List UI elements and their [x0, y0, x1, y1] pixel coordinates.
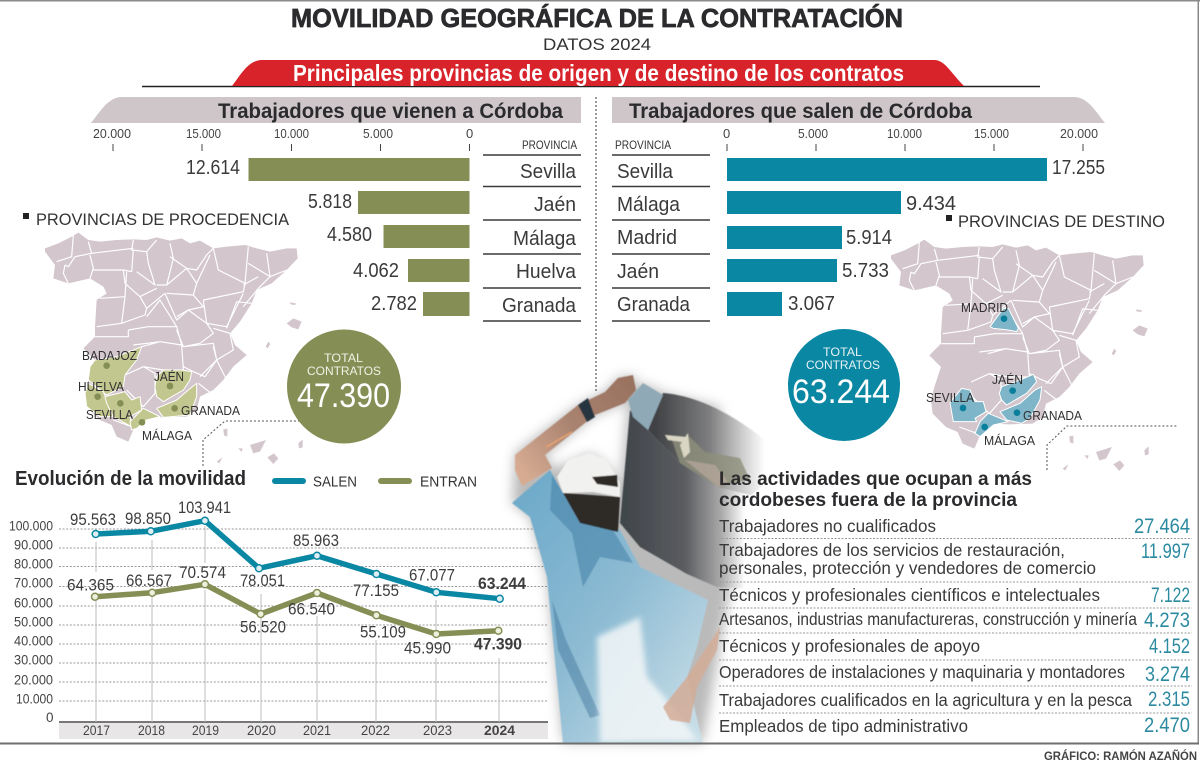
map labels: destination: GRANADA — [1023, 408, 1082, 423]
red banner: Principales provincias de origen y de destino de los contratos — [293, 60, 904, 86]
row values — [1134, 515, 1190, 737]
province table: vienen: Sevilla — [520, 161, 577, 183]
axis: vienen: 5.000 — [363, 126, 393, 141]
data labels: 78.051 — [240, 571, 285, 590]
province table: salen: Jaén — [617, 261, 659, 283]
y axis and gridlines — [9, 518, 548, 739]
sack front panel — [620, 410, 770, 590]
province table: vienen: Jaén — [534, 194, 576, 216]
bottom rule — [0, 742, 1199, 744]
bar chart: salen: 3.067 — [788, 292, 835, 315]
cap — [557, 453, 620, 497]
map labels: origin: BADAJOZ — [82, 348, 137, 363]
neck and hair — [563, 493, 620, 532]
data labels: 85.963 — [293, 531, 339, 550]
divider — [595, 97, 597, 392]
map labels: destination: MÁLAGA — [984, 433, 1035, 448]
axis: salen: 5.000 — [798, 126, 828, 141]
data labels: 70.574 — [179, 563, 226, 582]
axis: vienen: 20.000 — [93, 126, 131, 141]
total circle: origin: CONTRATOS — [307, 364, 381, 378]
bar chart: vienen: 4.580 — [327, 223, 372, 246]
map labels: origin: JAÉN — [154, 369, 184, 384]
chart heading: Evolución de la movilidad — [15, 467, 246, 490]
province table: vienen: Málaga — [513, 228, 577, 250]
map shape: Spain destination — [891, 240, 1149, 471]
x axis years: 2022 — [361, 723, 390, 738]
total circle: origin: 47.390 — [297, 377, 390, 415]
row labels: Operadores de instalaciones y maquinaria y montadores — [719, 662, 1125, 682]
total circle: origin — [287, 330, 401, 444]
y axis and gridlines: 70.000 — [14, 576, 53, 590]
year drop lines — [96, 526, 499, 722]
data labels: 77.155 — [353, 581, 399, 600]
panel: activities table — [719, 469, 1192, 737]
map labels: destination: MADRID — [961, 300, 1008, 315]
row values: 4.273 — [1144, 609, 1190, 632]
bar chart: salen: 9.434 — [906, 192, 956, 215]
row values: 27.464 — [1134, 515, 1190, 538]
watch — [578, 398, 595, 422]
table heading: cordobeses fuera de la provincia — [719, 490, 1017, 511]
province table: salen: PROVINCIA — [615, 138, 671, 152]
map heading: procedencia: PROVINCIAS DE PROCEDENCIA — [36, 210, 290, 229]
line chart: evolution of mobility — [9, 467, 548, 739]
data labels: 95.563 — [70, 510, 116, 529]
row labels: Técnicos y profesionales de apoyo — [719, 636, 980, 656]
province table: vienen: Granada — [502, 295, 577, 317]
bar chart: vienen: 4.062 — [353, 259, 399, 282]
row labels: Técnicos y profesionales científicos e intelectuales — [719, 585, 1100, 605]
x axis years: 2021 — [303, 723, 331, 738]
row values: 2.470 — [1144, 714, 1190, 737]
panel: workers leaving Córdoba — [612, 97, 1105, 321]
heading: salen: Trabajadores que salen de Córdoba — [629, 100, 972, 123]
axis: vienen: 15.000 — [186, 126, 221, 141]
province table: salen: Málaga — [617, 194, 681, 216]
axis: salen — [723, 126, 1098, 151]
total circle: destination: 63.244 — [792, 373, 890, 411]
row labels: Trabajadores de los servicios de restauración, — [719, 540, 1065, 560]
province table: vienen — [483, 138, 581, 321]
data labels: 103.941 — [178, 498, 231, 517]
heading: vienen: Trabajadores que vienen a Córdoba — [218, 100, 563, 123]
map: provinces of origin — [23, 210, 303, 466]
row labels: Trabajadores cualificados en la agricultura y en la pesca — [719, 690, 1132, 710]
bar chart: vienen: 12.614 — [186, 156, 240, 179]
y axis and gridlines: 60.000 — [14, 596, 53, 610]
y axis and gridlines: 10.000 — [16, 692, 53, 706]
sack flap — [628, 383, 663, 430]
row labels: Empleados de tipo administrativo — [719, 716, 968, 736]
y axis and gridlines: 80.000 — [14, 556, 53, 572]
row values: 2.315 — [1148, 688, 1190, 711]
line: salen — [92, 517, 503, 602]
x axis years: 2024 — [484, 723, 515, 738]
arm — [515, 375, 636, 486]
data labels: 98.850 — [125, 509, 171, 528]
province table: salen: Madrid — [617, 227, 677, 249]
map labels: origin: MÁLAGA — [142, 428, 192, 443]
y axis and gridlines: 0 — [46, 710, 54, 725]
x axis years: 2018 — [138, 723, 165, 738]
x axis years — [83, 723, 515, 738]
row labels: personales, protección y vendedores de comercio — [719, 558, 1096, 578]
data labels: 45.990 — [404, 638, 451, 658]
title: MOVILIDAD GEOGRÁFICA DE LA CONTRATACIÓN — [291, 3, 903, 33]
x axis years: 2017 — [83, 723, 110, 738]
data labels — [67, 498, 526, 658]
y axis and gridlines: 50.000 — [14, 614, 53, 630]
axis: salen: 20.000 — [1060, 126, 1098, 141]
heading: salen — [612, 97, 1105, 123]
sack interior — [648, 393, 770, 500]
legend: SALEN — [313, 474, 357, 490]
shirt — [512, 470, 708, 743]
subtitle: DATOS 2024 — [543, 35, 651, 54]
heading: vienen — [91, 97, 581, 123]
province table: salen: Sevilla — [617, 161, 674, 183]
data labels: 67.077 — [409, 566, 455, 584]
y axis and gridlines: 100.000 — [9, 518, 53, 534]
total circle: origin: TOTAL — [324, 351, 363, 365]
legend: ENTRAN — [420, 474, 477, 490]
bar chart: vienen: 2.782 — [371, 292, 417, 315]
row values: 3.274 — [1145, 663, 1190, 686]
data labels: 64.365 — [67, 576, 114, 594]
axis: salen: 15.000 — [974, 126, 1009, 141]
panel: workers coming to Córdoba — [91, 97, 581, 321]
total circle: destination: TOTAL — [823, 345, 862, 359]
row labels: Trabajadores no cualificados — [719, 516, 936, 536]
map: provinces of destination — [891, 212, 1178, 471]
map heading: destino: PROVINCIAS DE DESTINO — [958, 212, 1165, 231]
row separators — [719, 538, 1192, 713]
province table: salen: Granada — [617, 294, 691, 316]
x axis years: 2020 — [247, 723, 276, 738]
total circle: destination: CONTRATOS — [806, 358, 880, 372]
legend — [275, 474, 477, 490]
province table: salen — [612, 138, 710, 321]
bar chart: vienen — [186, 156, 470, 316]
province table: vienen: Huelva — [516, 261, 577, 283]
data labels: 55.109 — [360, 622, 406, 642]
map labels: origin: SEVILLA — [86, 407, 133, 422]
data labels: 66.540 — [288, 600, 335, 618]
map labels: origin: HUELVA — [78, 379, 124, 394]
total circle: destination — [788, 329, 900, 441]
axis: vienen — [93, 126, 473, 151]
row labels — [719, 516, 1137, 736]
y axis and gridlines: 20.000 — [14, 672, 53, 688]
highlighted provinces: destination — [950, 308, 1042, 437]
map labels: origin — [78, 348, 240, 443]
y axis and gridlines: 30.000 — [14, 652, 53, 668]
axis: vienen: 10.000 — [274, 126, 309, 141]
map labels: destination — [926, 300, 1082, 448]
map labels: destination: JAÉN — [992, 372, 1023, 387]
hand on hip — [663, 627, 720, 723]
table heading — [719, 469, 1032, 511]
row values: 4.152 — [1149, 635, 1190, 658]
table heading: Las actividades que ocupan a más — [719, 469, 1032, 490]
bar chart: vienen: 5.818 — [308, 190, 352, 213]
map labels: destination: SEVILLA — [926, 390, 974, 405]
data labels: 56.520 — [240, 618, 286, 636]
bar chart: salen: 5.914 — [846, 226, 892, 249]
y axis and gridlines: 90.000 — [14, 538, 53, 552]
bar chart: salen: 17.255 — [1052, 156, 1105, 179]
photo: farm worker lifting a sack — [512, 375, 770, 743]
axis: salen: 10.000 — [887, 126, 922, 141]
bar chart: salen: 5.733 — [842, 259, 889, 282]
map shape: Spain origin — [45, 233, 303, 464]
data labels: 47.390 — [474, 634, 522, 654]
province table: vienen: PROVINCIA — [522, 138, 577, 152]
x axis years: 2019 — [192, 723, 219, 738]
axis: vienen: 0 — [466, 126, 473, 141]
y axis and gridlines: 40.000 — [14, 634, 53, 648]
axis: salen: 0 — [723, 126, 730, 141]
line: entran — [92, 581, 502, 638]
x axis years: 2023 — [423, 723, 452, 738]
data labels: 66.567 — [126, 571, 172, 590]
data labels: 63.244 — [478, 574, 526, 593]
row labels: Artesanos, industrias manufactureras, construcción y minería — [719, 609, 1137, 629]
bar chart: salen — [727, 156, 1105, 316]
map labels: origin: GRANADA — [181, 403, 240, 418]
